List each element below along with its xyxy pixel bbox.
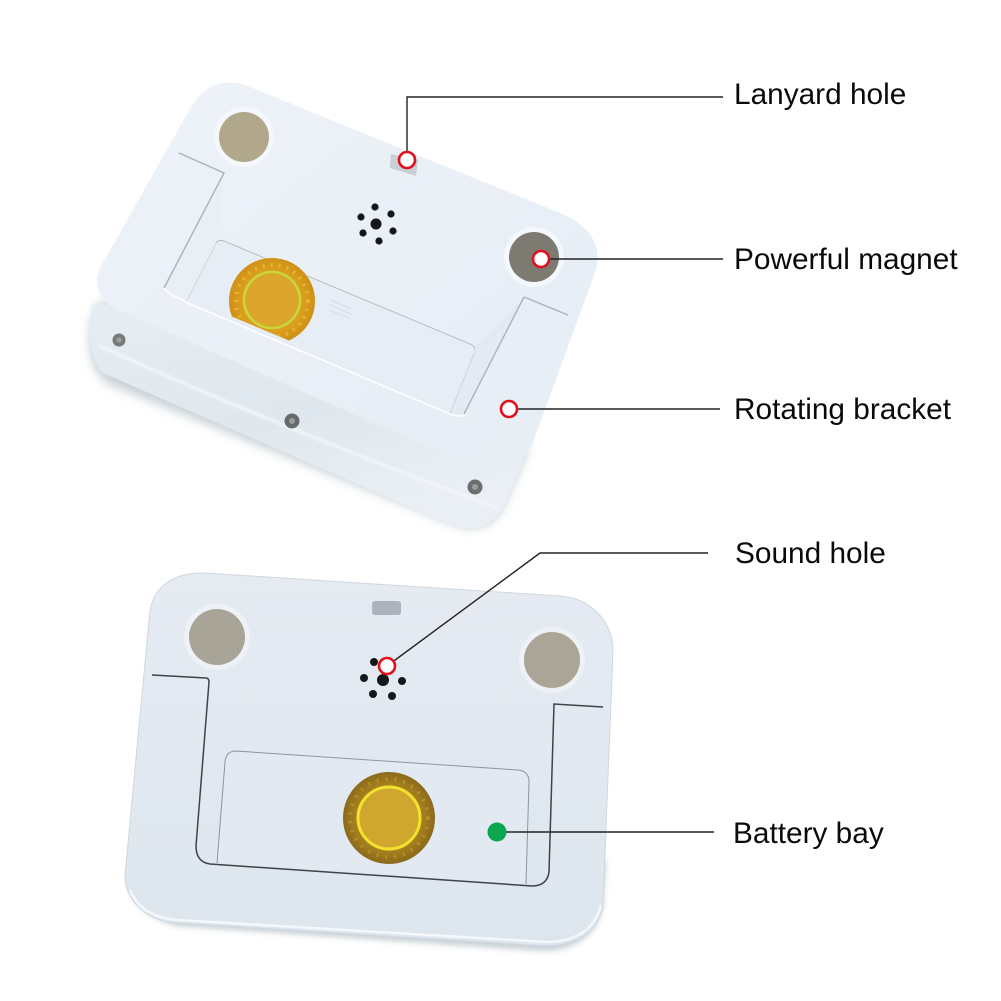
soft shadow <box>128 860 606 951</box>
device: angled view <box>89 83 598 528</box>
soft shadow <box>89 300 530 528</box>
callout: sound hole <box>379 537 886 674</box>
screws <box>112 334 482 494</box>
battery cover <box>217 751 529 884</box>
bottom rim <box>130 890 601 942</box>
recess front edge <box>164 288 466 416</box>
battery cover arrows <box>329 300 352 318</box>
callout: rotating bracket: Rotating bracket <box>734 393 952 426</box>
bracket arm lines <box>164 153 568 414</box>
yellow button <box>229 258 315 344</box>
callout: battery bay: Battery bay <box>733 817 884 850</box>
magnet: right <box>504 227 564 287</box>
callout: powerful magnet: Powerful magnet <box>734 243 958 276</box>
yellow button <box>343 772 435 864</box>
battery cover <box>186 240 475 414</box>
device: flat view <box>125 573 613 951</box>
callout: battery bay <box>488 817 884 850</box>
bracket outline <box>152 675 603 886</box>
callout: rotating bracket <box>501 393 952 426</box>
body <box>125 573 613 946</box>
lower body <box>90 300 532 528</box>
magnet: right <box>519 627 585 693</box>
callout: sound hole: Sound hole <box>735 537 886 570</box>
callout: powerful magnet <box>533 243 958 276</box>
callout: lanyard hole: Lanyard hole <box>734 78 906 111</box>
magnet: top left <box>214 107 274 167</box>
sound holes <box>357 203 397 245</box>
lanyard slot <box>372 601 401 615</box>
seam between lower body and face <box>98 345 498 508</box>
callout: lanyard hole <box>399 78 906 168</box>
right wall of recess <box>450 297 524 414</box>
magnet: left <box>184 604 250 670</box>
sound holes <box>360 658 406 700</box>
lanyard slot <box>390 154 418 176</box>
top face <box>97 83 598 471</box>
left wall of recess <box>164 174 224 302</box>
